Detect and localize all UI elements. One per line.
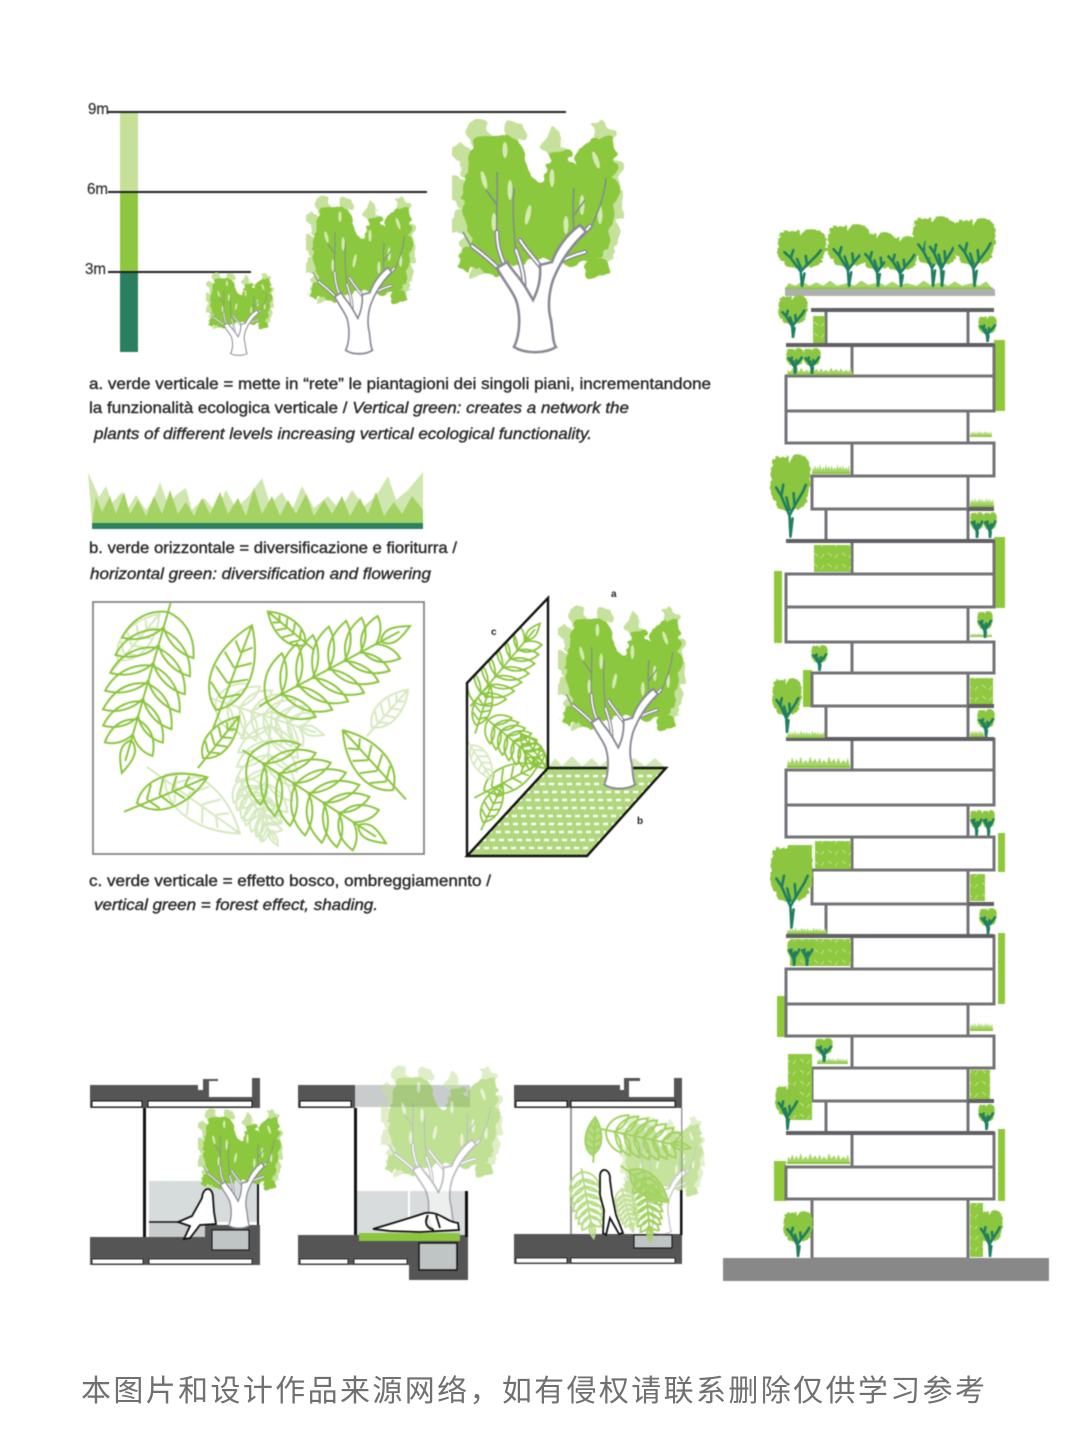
section 2: person lying on grass [298,1063,506,1280]
green trees [770,217,1003,1256]
tree, faded [375,1063,506,1229]
text block c [89,873,492,914]
caption: 本图片和设计作品来源网络，如有侵权请联系删除仅供学习参考 [81,1375,985,1408]
text block c: c. verde verticale = effetto bosco, ombreggiamennto / [89,873,492,890]
tree a [552,602,690,789]
green foreground leaves [85,592,428,875]
tree [194,1106,285,1228]
text block a: la funzionalità ecologica verticale / Vertical green: creates a network the [89,400,629,417]
person standing [600,1170,623,1235]
vertical plane leaves [467,622,548,832]
text block a: a. verde verticale = mette in “rete” le piantagioni dei singoli piani, incrementandone [89,376,711,393]
text block b: horizontal green: diversification and flowering [90,566,431,583]
ground [723,1258,1049,1281]
height lines and labels [85,101,566,278]
text block a: plants of different levels increasing vertical ecological functionality. [93,426,592,443]
height lines and labels: 9m [88,101,109,118]
text block b [89,540,458,583]
diagram: perspective of green planes [452,589,690,856]
section 1: seated person under tree [90,1078,285,1265]
textured green walls [788,316,993,1257]
vertical green bars [774,340,1005,1201]
medium tree 6m [301,193,419,354]
person lying [373,1213,459,1232]
floors [786,310,994,1259]
plane outlines [467,598,666,856]
height lines and labels: 6m [87,181,108,198]
chart: height scale with three trees [85,101,629,355]
pale background leaves [100,605,416,854]
large tree 9m [444,115,629,352]
building section elevation [723,217,1049,1281]
text block a [89,376,711,443]
grass patches [785,281,994,1164]
letter labels [491,589,643,827]
section 3: standing person among leaves [514,1078,707,1264]
scale bar [120,112,138,352]
floor plane [466,756,666,855]
small tree 3m [203,271,276,355]
text block c: vertical green = forest effect, shading. [94,897,378,914]
height lines and labels: 3m [85,261,106,278]
tree and leaves [566,1109,707,1242]
panel: leaf pattern [85,592,428,875]
letter labels: c [491,627,497,638]
letter labels: a [611,589,617,600]
person seated [178,1189,216,1239]
letter labels: b [637,816,643,827]
balcony slabs [786,310,994,1133]
roof slab [785,289,995,296]
text block b: b. verde orizzontale = diversificazione e fioriturra / [89,540,458,557]
horizontal green grass strip [88,472,423,529]
